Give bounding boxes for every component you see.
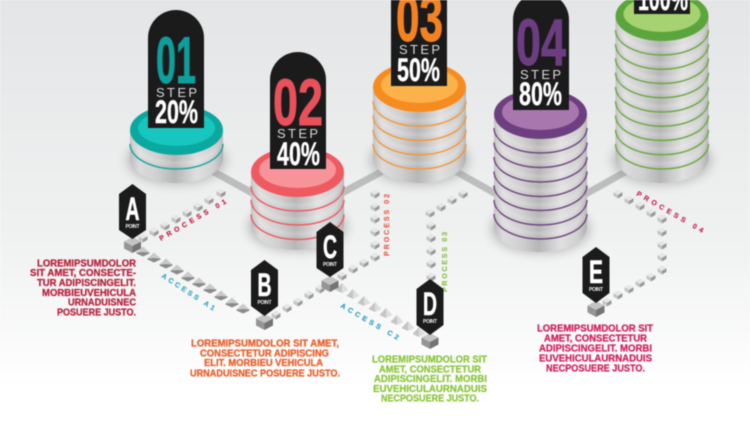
point C marker xyxy=(316,222,344,292)
text block A: TUR ADIPISCINGELIT. xyxy=(37,278,136,289)
tab: step 03 50%: 50% xyxy=(397,52,440,88)
point A marker: A xyxy=(126,191,140,227)
text block B: LOREMIPSUMDOLOR SIT AMET, xyxy=(191,338,339,350)
text block B: ELIT. MORBIEU VEHICULA xyxy=(204,358,323,369)
text block B: URNADUISNEC POSUERE JUSTO. xyxy=(190,368,340,380)
dotted path: process 04 xyxy=(602,190,666,306)
text block A: MORBIEUVEHICULA xyxy=(42,288,136,299)
cylinder 5 green xyxy=(612,0,712,185)
point C marker: C xyxy=(323,229,337,265)
text block E xyxy=(537,324,653,374)
text block D: NECPOSUERE JUSTO. xyxy=(381,394,479,404)
point E marker: E xyxy=(589,254,603,290)
text block D xyxy=(372,354,487,404)
dotted path: access A1 xyxy=(136,246,250,314)
text block E: AMET, CONSECTETUR xyxy=(544,334,647,344)
cylinder 3 orange xyxy=(370,62,470,185)
tab: step 03 50%: STEP xyxy=(399,42,440,57)
tab: step 03 50% xyxy=(391,0,447,88)
text block E: LOREMIPSUMDOLOR SIT xyxy=(537,324,653,334)
text block D: AMET, CONSECTETUR xyxy=(379,364,481,376)
dotted path: process 01 xyxy=(138,188,226,242)
text block A: URNADUISNEC xyxy=(68,298,136,308)
label: access C2: ACCESS C2 xyxy=(339,303,400,342)
point A marker xyxy=(119,184,146,253)
tab: step 02 40%: STEP xyxy=(277,126,318,141)
point E marker: POINT xyxy=(589,287,603,293)
point B marker xyxy=(251,260,278,330)
tab: step 02 40% xyxy=(270,52,326,172)
text block B: CONSECTETUR ADIPISCING xyxy=(200,348,329,360)
point D marker: D xyxy=(423,286,437,322)
label: process 04: PROCESS 04 xyxy=(635,191,704,235)
text block E: NECPOSUERE JUSTO. xyxy=(546,364,645,374)
text block A: SIT AMET, CONSECTE- xyxy=(30,268,136,279)
tab: step 04 80%: 04 xyxy=(516,5,566,79)
label: process 03: PROCESS 03 xyxy=(442,232,449,292)
point B marker: POINT xyxy=(258,300,272,306)
tab: step 01 20%: 01 xyxy=(156,23,196,97)
label: process 02: PROCESS 02 xyxy=(384,194,391,256)
dotted path: B to C xyxy=(272,284,324,320)
point A marker: POINT xyxy=(126,224,140,230)
text block D: ADIPISCINGELIT. MORBI xyxy=(374,374,487,385)
point D marker: POINT xyxy=(423,319,437,325)
tab: step 04 80% xyxy=(513,0,569,112)
label: access A1: ACCESS A1 xyxy=(160,273,216,312)
tab: step 01 20%: 20% xyxy=(155,94,198,130)
tab: step 01 20%: STEP xyxy=(156,85,197,100)
tab: step 05 100% xyxy=(634,0,690,17)
label: process 01: PROCESS 01 xyxy=(158,199,228,243)
tab: step 01 20% xyxy=(148,10,204,130)
point B marker: B xyxy=(258,267,272,303)
dotted path: access C2 xyxy=(336,283,426,337)
cylinder 1 teal xyxy=(126,105,226,185)
text block B xyxy=(190,338,340,380)
text block A: POSUERE JUSTO. xyxy=(57,308,136,318)
tab: step 02 40%: 40% xyxy=(277,136,320,172)
dotted path: process 03 xyxy=(426,190,468,282)
text block D: LOREMIPSUMDOLOR SIT xyxy=(372,354,487,366)
text block A xyxy=(30,258,136,318)
point E marker xyxy=(582,247,610,317)
cylinder 4 purple xyxy=(490,89,590,254)
tab: step 04 80%: STEP xyxy=(520,67,561,82)
point D marker xyxy=(416,279,444,349)
point C marker: POINT xyxy=(323,262,337,268)
text block E: EUVEHICULAURNADUIS xyxy=(539,354,652,364)
tab: step 02 40%: 02 xyxy=(273,65,323,139)
dotted path: process 02 xyxy=(338,190,380,280)
tab: step 04 80%: 80% xyxy=(519,76,562,112)
text block A: LOREMIPSUMDOLOR xyxy=(37,258,136,270)
text block D: EUVEHICULAURNADUIS xyxy=(373,384,487,395)
text block E: ADIPISCINGELIT. MORBI xyxy=(539,344,652,354)
connector pipes between cylinders xyxy=(205,166,634,195)
cylinder 2 red xyxy=(248,147,348,252)
